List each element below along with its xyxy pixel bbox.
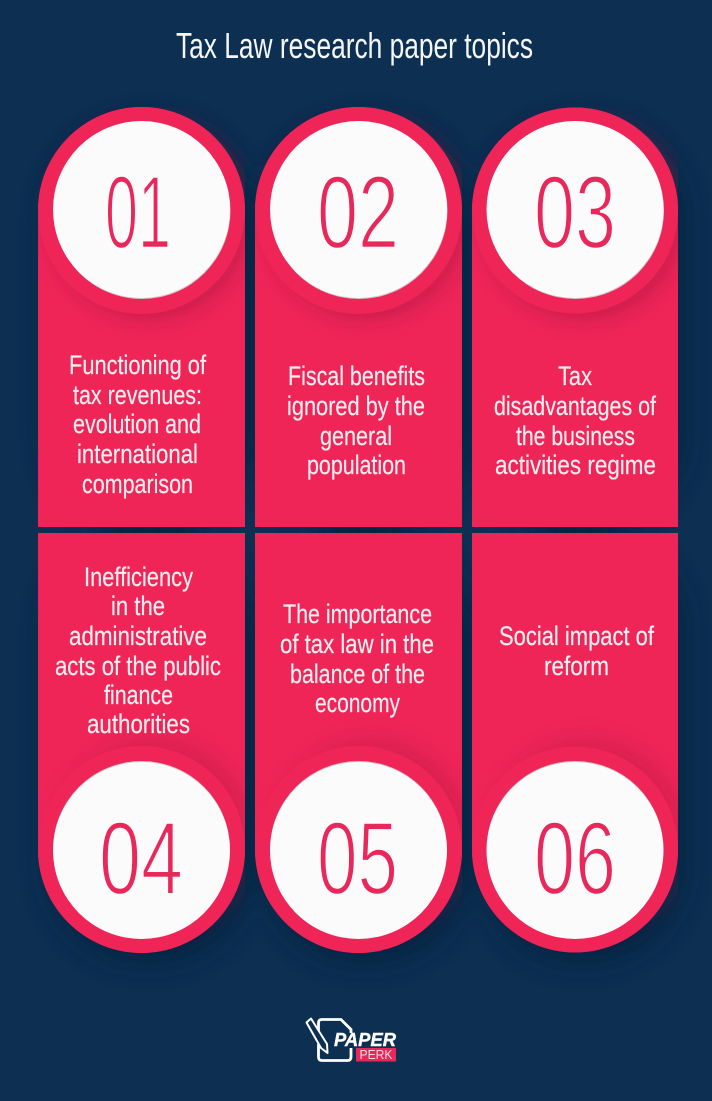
number 06: 06: [534, 801, 616, 917]
topic text 05: [280, 599, 434, 718]
topic text 03: the business: [516, 421, 635, 451]
topic text 06: reform: [544, 651, 609, 681]
number 05: 05: [317, 801, 398, 917]
topic text 06: [499, 621, 654, 681]
topic text 01: Functioning of: [69, 350, 206, 380]
topic text 01: evolution and: [73, 409, 201, 439]
number 01: 01: [105, 155, 171, 271]
wordmark paper: PAPER: [334, 1029, 397, 1050]
icon: pencil: [306, 1018, 328, 1053]
number 04: 04: [99, 801, 183, 917]
panel 02: [255, 107, 467, 527]
badge perk: PERK: [360, 1048, 393, 1062]
topic text 03: activities regime: [495, 450, 656, 480]
topic text 05: of tax law in the: [280, 629, 434, 659]
topic text 02: Fiscal benefits: [288, 361, 425, 391]
topic text 02: [287, 361, 425, 480]
topic text 04: [55, 562, 221, 739]
topic text 04: authorities: [87, 709, 190, 739]
topic text 01: tax revenues:: [73, 380, 202, 410]
panel shadows: [46, 120, 686, 964]
panel 03: [472, 107, 684, 527]
topic text 04: finance: [104, 680, 173, 710]
topic text 05: economy: [315, 688, 400, 718]
icon: paper sheet: [318, 1020, 351, 1060]
number 03: 03: [534, 155, 616, 271]
topic text 04: administrative: [69, 621, 207, 651]
panel 06: [472, 533, 687, 952]
topic text 04: acts of the public: [55, 651, 221, 681]
number 02: 02: [317, 155, 399, 271]
topic text 03: [494, 361, 656, 480]
panel 05: [255, 533, 471, 953]
topic text 02: population: [307, 450, 406, 480]
topic text 02: general: [320, 421, 392, 451]
topic text 01: international: [77, 439, 198, 469]
title: Tax Law research paper topics: [176, 25, 533, 66]
topic text 03: disadvantages of: [494, 391, 656, 421]
topic text 02: ignored by the: [287, 391, 425, 421]
topic text 04: Inefficiency: [84, 562, 193, 592]
topic text 04: in the: [111, 591, 165, 621]
panel 01: [38, 107, 250, 527]
topic text 05: balance of the: [290, 659, 425, 689]
topic text 06: Social impact of: [499, 621, 654, 651]
topic text 01: comparison: [82, 469, 193, 499]
topic text 05: The importance: [283, 599, 432, 629]
topic text 03: Tax: [558, 361, 592, 391]
logo: [306, 1018, 397, 1062]
topic text 01: [69, 350, 206, 499]
panel 04: [38, 533, 254, 953]
